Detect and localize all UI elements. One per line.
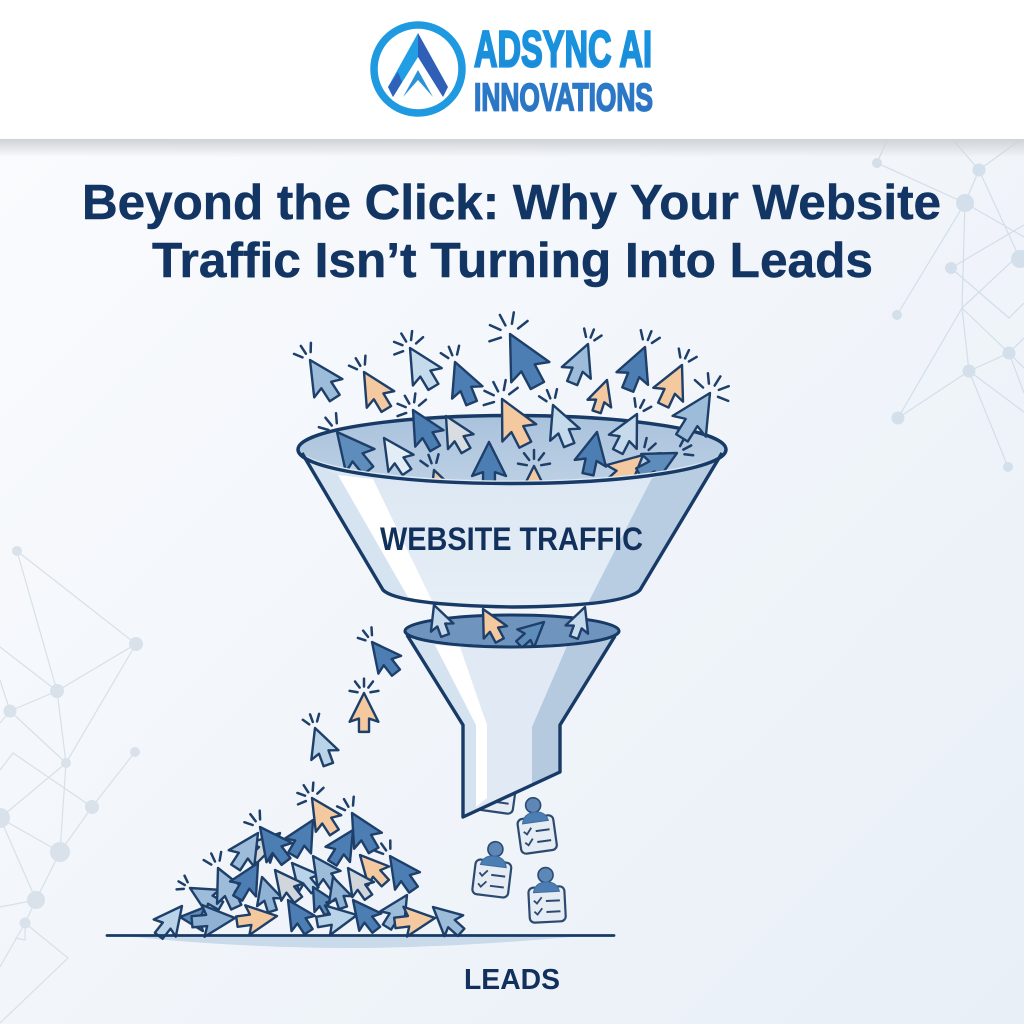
- lead cards: [472, 795, 566, 923]
- cursors above upper funnel: [287, 305, 737, 459]
- logo: [374, 20, 653, 120]
- logo wordmark line 1: ADSYNC AI: [474, 20, 652, 78]
- lower funnel rim: [405, 615, 619, 647]
- logo icon: [374, 25, 462, 113]
- pile of cursors: [148, 777, 470, 944]
- upper funnel rim: [298, 416, 726, 484]
- decorative network: bottom left: [0, 546, 143, 1023]
- upper funnel body: [298, 450, 726, 607]
- cursor entering lower funnel: [511, 613, 552, 654]
- ground line: [107, 934, 614, 937]
- header bar shadow: [0, 139, 1024, 157]
- decorative network: top right: [872, 140, 1024, 472]
- logo wordmark line 2: INNOVATIONS: [474, 76, 653, 120]
- cursors falling between funnels: [423, 601, 596, 647]
- cursors trailing to the pile: [297, 622, 407, 769]
- title: [82, 176, 941, 288]
- lead card hidden under funnel: [477, 755, 520, 814]
- title: Traffic Isn’t Turning Into Leads: [152, 234, 873, 288]
- title: Beyond the Click: Why Your Website: [82, 176, 941, 230]
- header bar: [0, 0, 1024, 139]
- label: website traffic: WEBSITE TRAFFIC: [380, 521, 643, 557]
- lower funnel: [405, 613, 619, 817]
- lower funnel body: [405, 631, 619, 817]
- cursors inside upper funnel: [311, 406, 699, 516]
- ground shadow: [125, 936, 582, 948]
- upper funnel: [298, 406, 726, 607]
- label: leads: LEADS: [464, 964, 560, 996]
